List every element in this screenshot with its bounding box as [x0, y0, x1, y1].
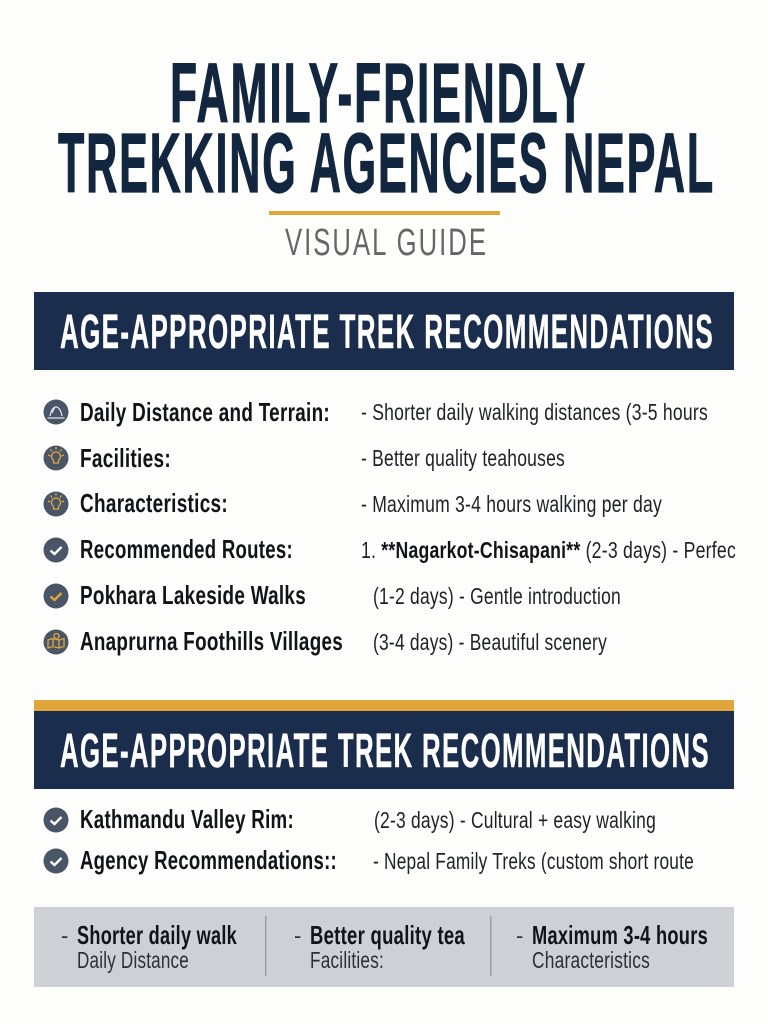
title: [58, 46, 715, 210]
row: agency recommendations: Agency Recommendations::: [80, 845, 337, 875]
row: daily distance: Daily Distance and Terrain:: [80, 397, 330, 427]
panel: second section banner: [34, 700, 734, 789]
summary: characteristics: Characteristics: [532, 947, 650, 973]
title accent rule: [269, 211, 500, 215]
row: characteristics: Characteristics:: [80, 488, 228, 518]
row: pokhara lakeside walks: Pokhara Lakeside Walks: [80, 580, 306, 610]
panel: first section banner: [34, 292, 734, 370]
summary: characteristics: [516, 920, 708, 973]
row: pokhara lakeside walks: (1-2 days) - Gentle introduction: [373, 583, 621, 609]
summary: daily distance: -: [61, 923, 68, 948]
panel: summary strip: [34, 907, 734, 987]
row: daily distance: [44, 397, 708, 427]
row: facilities: [44, 443, 565, 473]
panel: second section rows: [44, 804, 694, 875]
summary: daily distance: Daily Distance: [77, 947, 189, 973]
summary: daily distance: [61, 920, 237, 973]
summary: facilities: Better quality tea: [310, 920, 465, 950]
subtitle: VISUAL GUIDE: [285, 222, 488, 264]
row: characteristics: - Maximum 3-4 hours walking per day: [361, 491, 662, 517]
summary: facilities: [294, 920, 465, 973]
panel: first section rows: [44, 397, 736, 656]
summary: characteristics: -: [516, 923, 523, 948]
row: pokhara lakeside walks: [44, 580, 621, 610]
row: agency recommendations: [44, 845, 694, 875]
summary: facilities: Facilities:: [310, 947, 384, 973]
row: kathmandu valley rim: [44, 804, 656, 834]
row: characteristics: [44, 488, 662, 518]
row: kathmandu valley rim: (2-3 days) - Cultural + easy walking: [374, 807, 656, 833]
row: annapurna foothills villages: (3-4 days) - Beautiful scenery: [373, 629, 607, 655]
row: kathmandu valley rim: Kathmandu Valley Rim:: [80, 804, 294, 834]
row: recommended routes: [44, 534, 736, 564]
summary: facilities: -: [294, 923, 301, 948]
row: facilities: - Better quality teahouses: [361, 445, 565, 471]
row: recommended routes: Recommended Routes:: [80, 534, 293, 564]
row: facilities: Facilities:: [80, 443, 171, 473]
row: annapurna foothills villages: Anaprurna Foothills Villages: [80, 626, 343, 656]
row: annapurna foothills villages: [44, 626, 607, 656]
summary: daily distance: Shorter daily walk: [77, 920, 237, 950]
